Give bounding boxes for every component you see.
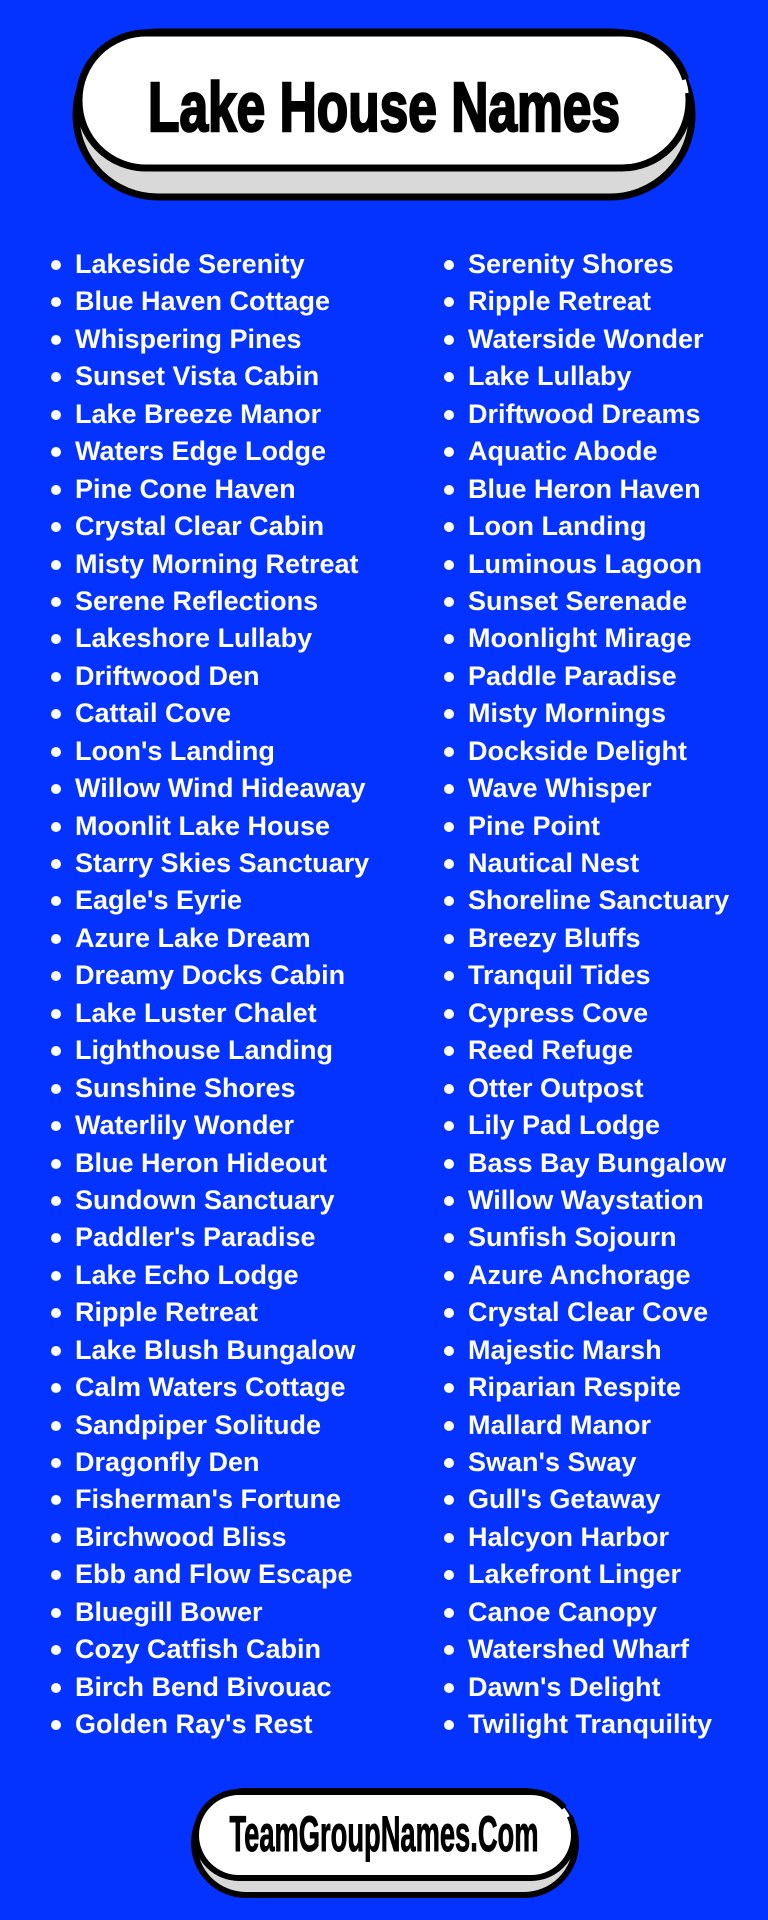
left column list: Blue Heron Hideout <box>75 1148 327 1178</box>
left column list: Sunset Vista Cabin <box>75 361 319 391</box>
right column list: Breezy Bluffs <box>468 923 641 953</box>
left column list: Pine Cone Haven <box>75 474 296 504</box>
left column list: Starry Skies Sanctuary <box>75 848 369 878</box>
left column list: Ebb and Flow Escape <box>75 1559 353 1589</box>
left column list: Lakeshore Lullaby <box>75 623 312 653</box>
right column list: Luminous Lagoon <box>468 548 702 578</box>
right column list: Twilight Tranquility <box>468 1709 712 1739</box>
left column list: Birchwood Bliss <box>75 1522 287 1552</box>
left column list: Eagle's Eyrie <box>75 885 242 915</box>
left column list: Lake Breeze Manor <box>75 399 321 429</box>
left column list: Ripple Retreat <box>75 1297 258 1327</box>
left column list: Cozy Catfish Cabin <box>75 1634 321 1664</box>
left column list: Calm Waters Cottage <box>75 1372 346 1402</box>
left column list: Waterlily Wonder <box>75 1110 294 1140</box>
left column list: Whispering Pines <box>75 324 302 354</box>
left column list: Lake Luster Chalet <box>75 998 317 1028</box>
left column list: Lighthouse Landing <box>75 1035 333 1065</box>
right column list: Wave Whisper <box>468 773 652 803</box>
left column list: Lake Blush Bungalow <box>75 1335 356 1365</box>
right column list: Loon Landing <box>468 511 646 541</box>
right column list: Serenity Shores <box>468 249 674 279</box>
right column list: Lakefront Linger <box>468 1559 681 1589</box>
left column list: Sundown Sanctuary <box>75 1185 335 1215</box>
right column list: Riparian Respite <box>468 1372 681 1402</box>
left column list: Serene Reflections <box>75 586 318 616</box>
left column list: Crystal Clear Cabin <box>75 511 324 541</box>
right column list <box>444 249 729 1739</box>
left column list: Dragonfly Den <box>75 1447 260 1477</box>
left column list <box>51 249 369 1739</box>
right column list: Driftwood Dreams <box>468 399 701 429</box>
right column list: Majestic Marsh <box>468 1335 662 1365</box>
right column list: Bass Bay Bungalow <box>468 1148 726 1178</box>
right column list: Lily Pad Lodge <box>468 1110 660 1140</box>
left column list: Sandpiper Solitude <box>75 1410 321 1440</box>
left column list: Driftwood Den <box>75 661 259 691</box>
left column list: Golden Ray's Rest <box>75 1709 312 1739</box>
footer badge <box>191 1788 579 1898</box>
left column list: Lakeside Serenity <box>75 249 305 279</box>
right column list: Willow Waystation <box>468 1185 704 1215</box>
left column list: Lake Echo Lodge <box>75 1260 299 1290</box>
right column list: Tranquil Tides <box>468 960 651 990</box>
right column list: Ripple Retreat <box>468 286 651 316</box>
title badge <box>72 28 696 200</box>
right column list: Dockside Delight <box>468 736 687 766</box>
right column list: Azure Anchorage <box>468 1260 691 1290</box>
right column list: Gull's Getaway <box>468 1484 660 1514</box>
left column list: Waters Edge Lodge <box>75 436 326 466</box>
left column list: Bluegill Bower <box>75 1597 263 1627</box>
left column list: Azure Lake Dream <box>75 923 311 953</box>
left column list: Paddler's Paradise <box>75 1222 316 1252</box>
left column list: Cattail Cove <box>75 698 231 728</box>
right column list: Halcyon Harbor <box>468 1522 669 1552</box>
right column list: Shoreline Sanctuary <box>468 885 729 915</box>
right column list: Watershed Wharf <box>468 1634 689 1664</box>
right column list: Mallard Manor <box>468 1410 651 1440</box>
right column list: Aquatic Abode <box>468 436 658 466</box>
right column list: Blue Heron Haven <box>468 474 701 504</box>
right column list: Misty Mornings <box>468 698 666 728</box>
right column list: Sunfish Sojourn <box>468 1222 676 1252</box>
right column list: Nautical Nest <box>468 848 639 878</box>
right column list: Crystal Clear Cove <box>468 1297 708 1327</box>
left column list: Willow Wind Hideaway <box>75 773 366 803</box>
right column list: Reed Refuge <box>468 1035 633 1065</box>
left column list: Moonlit Lake House <box>75 811 330 841</box>
left column list: Misty Morning Retreat <box>75 548 359 578</box>
right column list: Canoe Canopy <box>468 1597 657 1627</box>
left column list: Birch Bend Bivouac <box>75 1672 332 1702</box>
left column list: Loon's Landing <box>75 736 275 766</box>
right column list: Lake Lullaby <box>468 361 632 391</box>
right column list: Dawn's Delight <box>468 1672 660 1702</box>
left column list: Sunshine Shores <box>75 1073 296 1103</box>
right column list: Moonlight Mirage <box>468 623 691 653</box>
right column list: Pine Point <box>468 811 600 841</box>
right column list: Otter Outpost <box>468 1073 644 1103</box>
right column list: Sunset Serenade <box>468 586 687 616</box>
right column list: Waterside Wonder <box>468 324 704 354</box>
right column list: Cypress Cove <box>468 998 648 1028</box>
right column list: Swan's Sway <box>468 1447 636 1477</box>
left column list: Blue Haven Cottage <box>75 286 330 316</box>
left column list: Dreamy Docks Cabin <box>75 960 345 990</box>
left column list: Fisherman's Fortune <box>75 1484 341 1514</box>
right column list: Paddle Paradise <box>468 661 677 691</box>
